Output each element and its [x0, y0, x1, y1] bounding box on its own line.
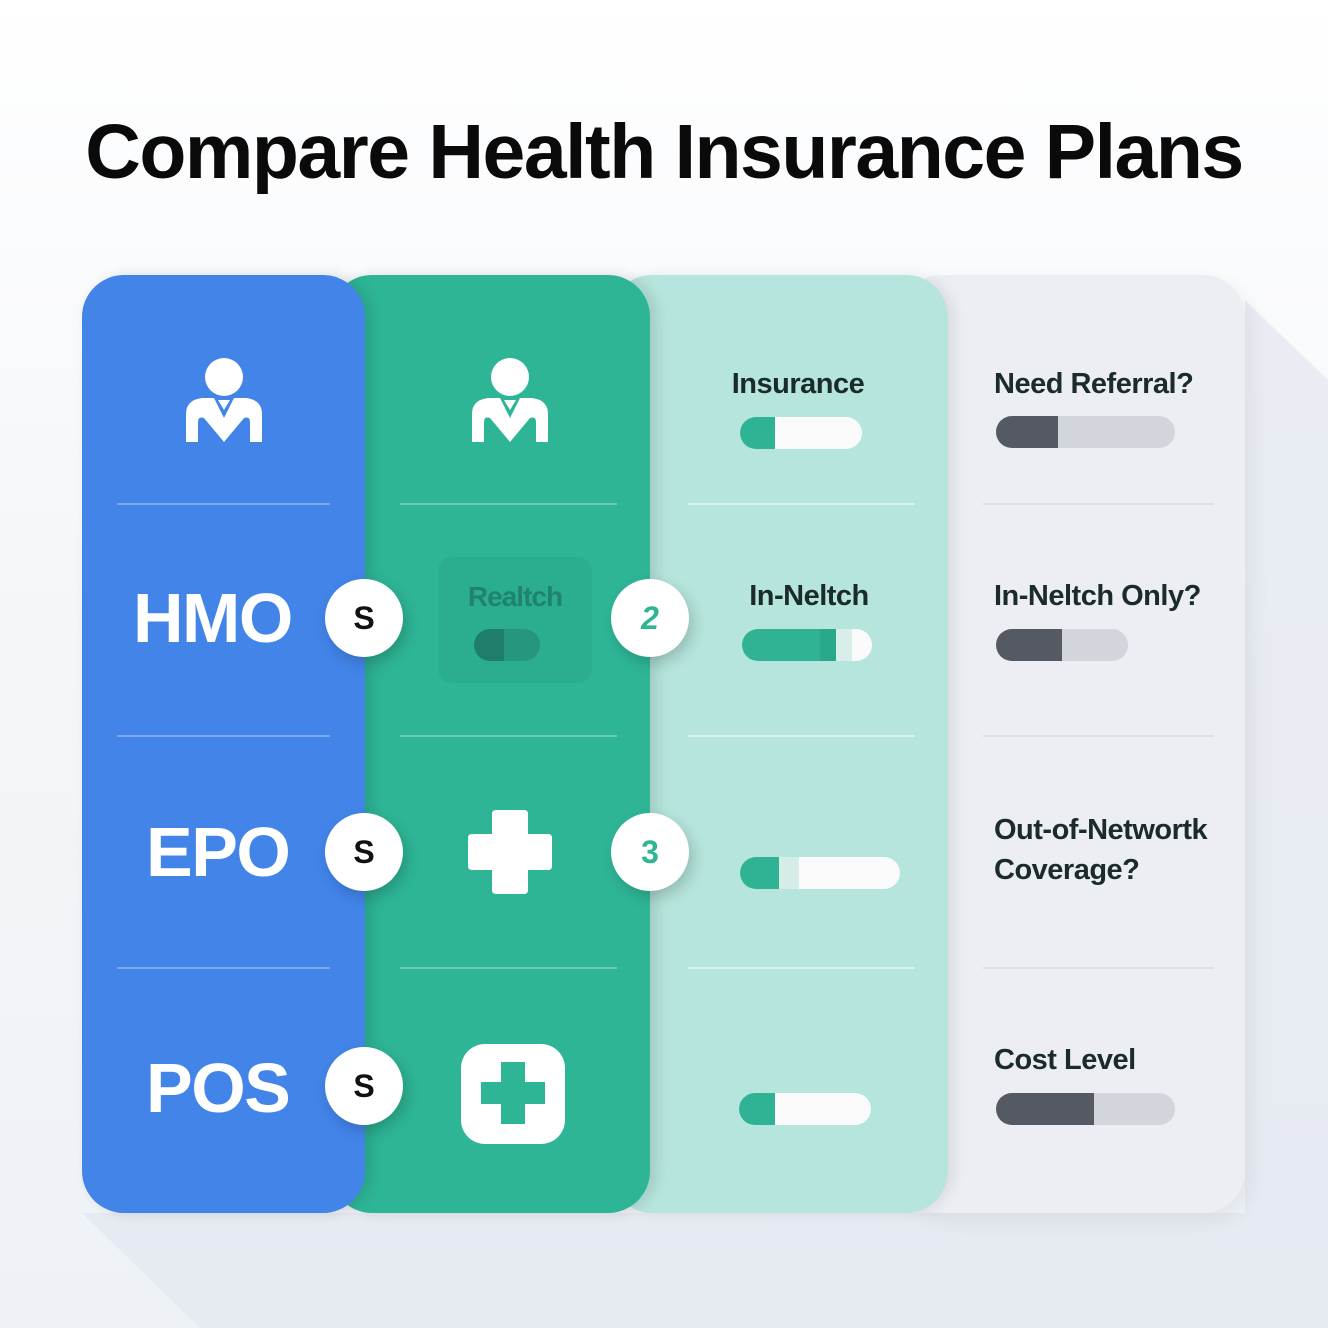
pill: Insurance — [740, 417, 862, 449]
label: In-Neltch: In-Neltch — [749, 580, 869, 612]
badge: HMO: S — [353, 600, 375, 636]
pill: In-Neltch — [742, 629, 872, 661]
pill: EPO — [740, 857, 900, 889]
badge: 3: 3 — [641, 834, 659, 870]
panel: blue — [82, 275, 365, 1213]
badge: 2: 2 — [641, 600, 659, 636]
label: Insurance: Insurance — [732, 368, 864, 400]
pill: POS — [739, 1093, 871, 1125]
badge: POS: S — [353, 1068, 375, 1104]
pill: cost — [996, 1093, 1175, 1125]
faded card: Realtch — [438, 557, 592, 683]
plan: HMO: HMO — [133, 579, 292, 657]
label: cost level: Cost Level — [994, 1044, 1136, 1076]
title: Compare Health Insurance Plans — [85, 109, 1243, 195]
panel: gray features — [900, 275, 1245, 1213]
faded card: Realtch: Realtch — [468, 581, 562, 612]
badge: EPO — [325, 813, 403, 891]
icon: plus square — [461, 1044, 565, 1144]
badge: 3 — [611, 813, 689, 891]
label: out-of-network: Out-of-Networtk — [994, 814, 1207, 846]
label: out-of-network: Coverage? — [994, 854, 1139, 886]
icon: doctor blue — [186, 358, 262, 442]
label: Need Referral: Need Referral? — [994, 368, 1193, 400]
badge: HMO — [325, 579, 403, 657]
icon: plus — [468, 810, 552, 894]
pill: referral — [996, 416, 1175, 448]
label: out-of-network — [994, 814, 1208, 886]
plan: POS: POS — [146, 1049, 289, 1127]
pill: network only — [996, 629, 1128, 661]
label: In-Neltch Only: In-Neltch Only? — [994, 580, 1201, 612]
plan: EPO: EPO — [146, 813, 289, 891]
badge: EPO: S — [353, 834, 375, 870]
badge: 2 — [611, 579, 689, 657]
icon: doctor green — [472, 358, 548, 442]
panel: green — [330, 275, 650, 1213]
badge: POS — [325, 1047, 403, 1125]
panel: mint — [610, 275, 948, 1213]
